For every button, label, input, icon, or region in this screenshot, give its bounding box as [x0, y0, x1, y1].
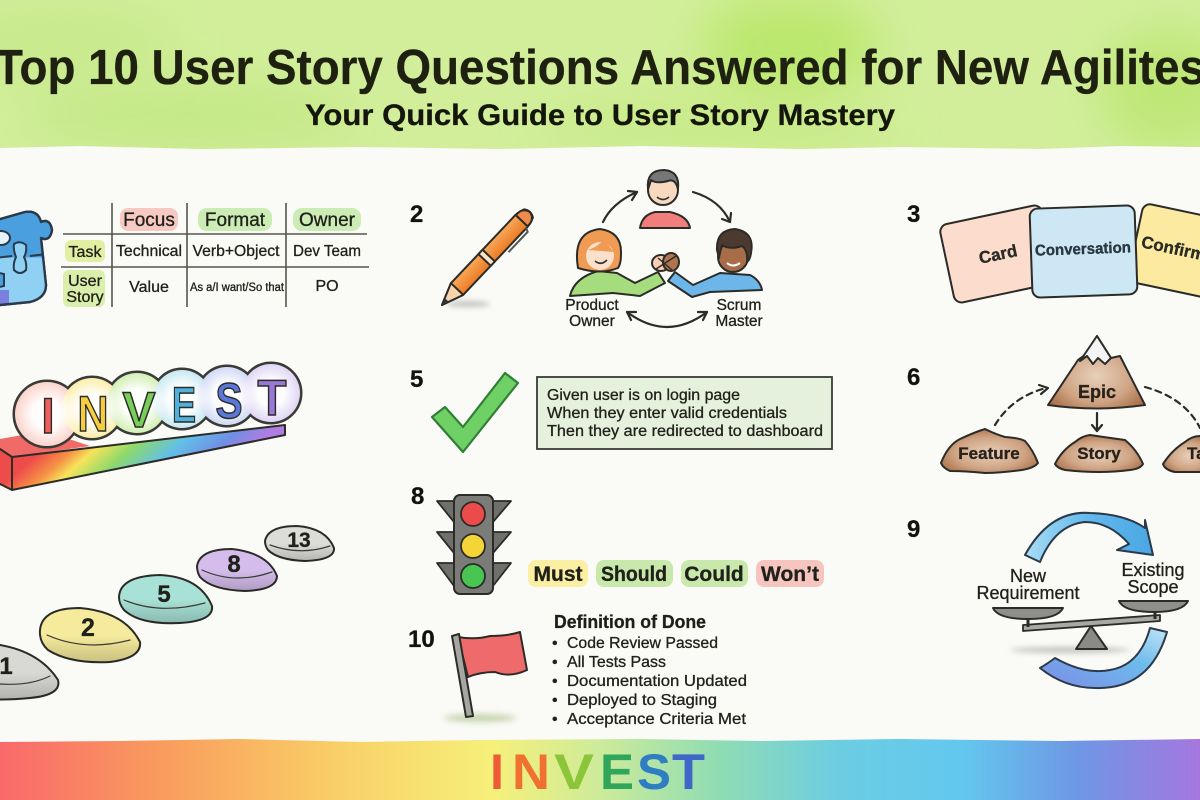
label: Product Owner: Product: [565, 297, 619, 314]
footer INVEST word: E: [600, 744, 634, 800]
list items: •: [552, 635, 558, 652]
panel 7: number line of story points: [0, 526, 334, 699]
label: Existing Scope: Existing: [1121, 560, 1185, 580]
arrow: bottom blue: [1040, 628, 1167, 688]
arrow: top blue: [1025, 513, 1153, 562]
panel 8: number: 8: [411, 483, 424, 510]
pebble: 2: 2: [81, 614, 95, 642]
scale: [993, 601, 1188, 653]
letters: [42, 370, 286, 444]
rock: Story: [1055, 435, 1143, 472]
footer INVEST word: N: [512, 744, 550, 800]
table cells: Dev Team: [293, 243, 361, 260]
table header: Format: Format: [205, 210, 266, 231]
table cells: Technical: [116, 243, 182, 260]
table grid: [61, 203, 369, 307]
mountain: Epic: Epic: [1078, 382, 1116, 402]
table header: Owner: Owner: [299, 210, 356, 231]
given when then box: Then they are redirected to dashboard: [547, 423, 823, 440]
person: scrum master: [668, 229, 762, 297]
rock: Story: Story: [1077, 444, 1121, 463]
arrow: epic to task: [1145, 387, 1200, 428]
rock: Feature: [941, 429, 1038, 473]
arrow: feature to epic: [995, 385, 1048, 425]
card: Card: [939, 204, 1057, 304]
table cells: Value: [129, 279, 169, 296]
rainbow base: [0, 425, 285, 490]
table header: Focus: Focus: [123, 210, 175, 231]
icon: traffic light: [437, 495, 511, 594]
definition of done list: [552, 612, 747, 728]
list items: Code Review Passed: [567, 635, 718, 652]
icon: flag: [444, 632, 527, 722]
arrow: owner and master: [627, 312, 707, 327]
hands: [652, 253, 679, 271]
pebble: 8: 8: [227, 551, 241, 578]
list items: Acceptance Criteria Met: [567, 711, 747, 728]
row label: User Story: User: [68, 273, 103, 290]
table cells: Verb+Object: [192, 243, 280, 260]
moscow labels: [528, 560, 824, 587]
panel 9: number: 9: [907, 516, 920, 543]
panel 3: number: 3: [907, 201, 920, 228]
cards: [939, 203, 1200, 305]
footer INVEST word: V: [554, 744, 595, 800]
list items: [552, 635, 747, 728]
pebble: 2: [40, 608, 140, 662]
letters: S: [216, 373, 242, 429]
panel 1: task vs user story table: [0, 203, 369, 310]
pill: Won't: Won’t: [761, 563, 819, 586]
row label: Task: [65, 240, 105, 262]
heading: Definition of Done: [554, 612, 706, 632]
pill: Should: Should: [601, 563, 667, 586]
label: New Requirement: New: [1010, 566, 1046, 586]
letters: V: [122, 382, 156, 438]
arrow: tester to master: [693, 192, 731, 222]
list items: •: [552, 654, 558, 671]
list items: •: [552, 692, 558, 709]
list items: All Tests Pass: [567, 654, 666, 671]
letters: N: [78, 386, 108, 442]
rock: Task: [1163, 436, 1200, 472]
panel 5: number: 5: [410, 366, 423, 393]
header banner: [0, 0, 1200, 150]
letters: T: [258, 370, 286, 426]
pill: Must: [528, 560, 588, 587]
label: Product Owner: Owner: [569, 313, 615, 330]
pill: Must: Must: [534, 563, 582, 586]
bubbles: [14, 363, 301, 447]
given when then box: When they enter valid credentials: [547, 405, 787, 422]
scope change diagram: [976, 513, 1188, 688]
list items: Deployed to Staging: [567, 692, 717, 709]
icon: pen: [436, 206, 539, 313]
person: tester: [640, 170, 690, 228]
pebble: 13: 13: [287, 529, 311, 552]
pebble: 5: [119, 575, 212, 623]
rock: Feature: Feature: [958, 444, 1020, 463]
panel 6: number: 6: [907, 364, 920, 391]
letters: E: [172, 377, 196, 433]
footer INVEST word: S: [637, 744, 671, 800]
subtitle: Your Quick Guide to User Story Mastery: [305, 99, 895, 132]
table cells: As a/I want/So that: [190, 282, 285, 294]
footer rainbow banner: [0, 739, 1200, 800]
card: Conversation: Conversation: [1035, 239, 1131, 260]
table cells: PO: [315, 278, 339, 295]
pebble: 5: 5: [157, 581, 171, 608]
table cells: [116, 243, 361, 296]
hierarchy diagram: [941, 336, 1200, 473]
pebble: 8: [197, 549, 277, 591]
icon: check mark: [432, 373, 518, 452]
label: Existing Scope: Scope: [1127, 577, 1179, 597]
person: product owner: [570, 229, 665, 296]
row label: User Story: Story: [66, 289, 104, 306]
card: Conversation: [1029, 205, 1138, 298]
label: New Requirement: Requirement: [976, 583, 1080, 603]
label: Scrum Master: Scrum: [717, 297, 761, 314]
footer INVEST word: T: [672, 744, 705, 800]
pebble: 1: [0, 645, 58, 699]
arrow: epic to story: [1092, 413, 1102, 431]
pill: Could: Could: [684, 563, 744, 586]
card: Confirmation: [1127, 203, 1200, 305]
list items: •: [552, 673, 558, 690]
footer INVEST word: [490, 744, 705, 800]
panel 4: INVEST blocks: [0, 363, 301, 490]
mountain: Epic: [1048, 336, 1145, 408]
label: Scrum Master: Master: [715, 313, 763, 330]
card: Card: Card: [977, 241, 1019, 268]
icon: puzzle: [0, 208, 55, 310]
given when then box: [537, 377, 832, 449]
pebble: 13: [265, 526, 334, 561]
row label: Task: Task: [69, 244, 102, 261]
letters: I: [42, 388, 54, 444]
arrow: owner to tester: [603, 191, 637, 222]
given when then box: Given user is on login page: [547, 387, 740, 404]
panel 10: number: 10: [408, 626, 435, 653]
footer INVEST word: I: [490, 744, 504, 800]
panel 2: number: 2: [410, 201, 423, 228]
list items: Documentation Updated: [567, 673, 747, 690]
diagram: three amigos: [565, 170, 763, 330]
row label: User Story: [63, 270, 105, 307]
list items: •: [552, 711, 558, 728]
